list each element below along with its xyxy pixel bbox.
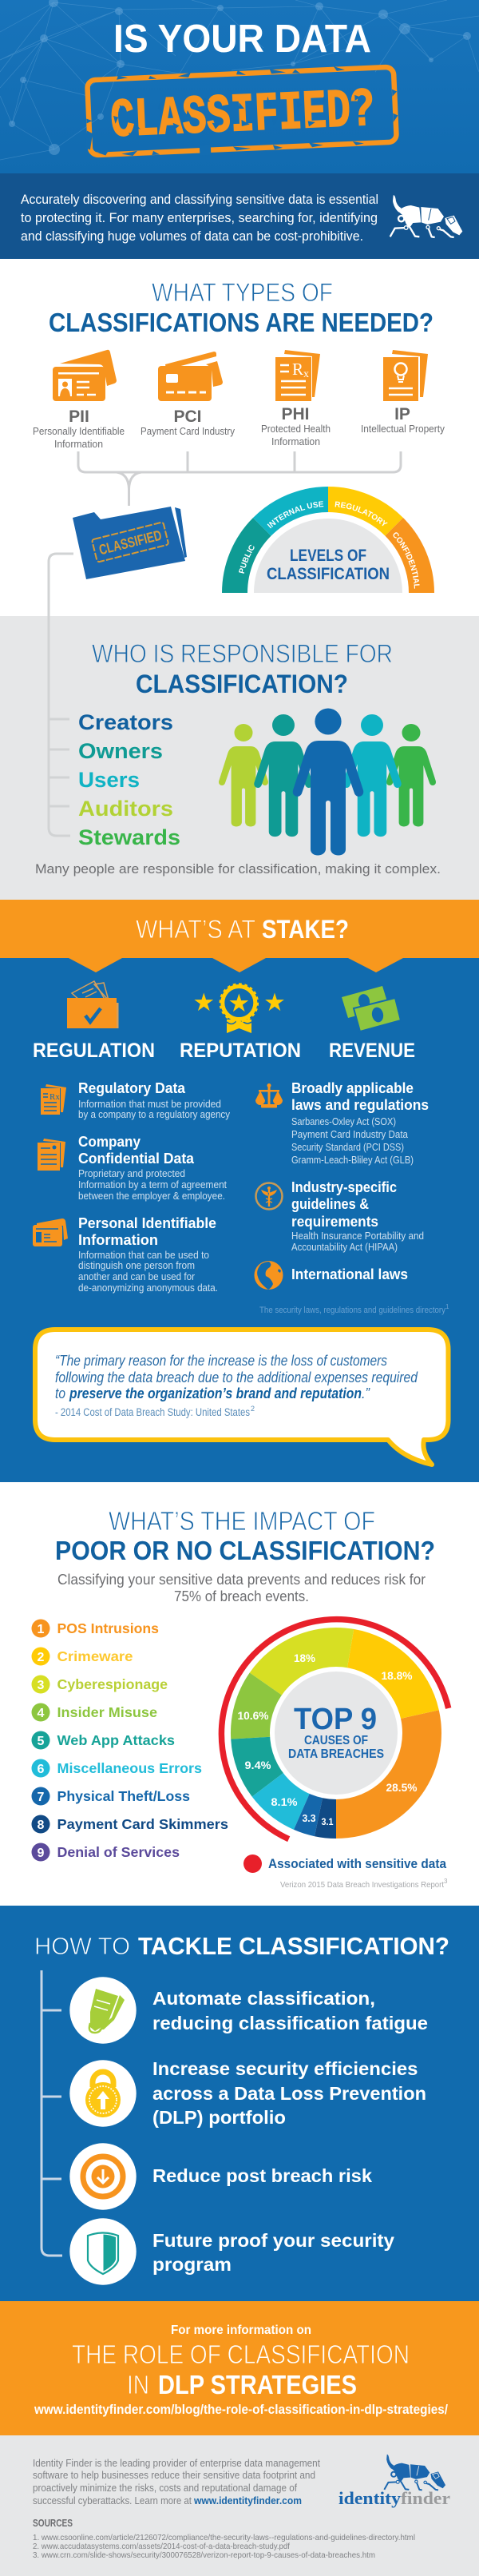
label: PII: PII	[69, 407, 89, 426]
logo: identity finder: finder	[401, 2488, 450, 2508]
icon: classified folder	[73, 507, 187, 579]
label: PCI: PCI	[173, 407, 202, 426]
icon: id card	[33, 1218, 68, 1246]
panel: footer	[0, 2435, 479, 2576]
panel: intro band	[0, 173, 479, 259]
item: company confidential data: Confidential Data	[78, 1151, 195, 1167]
gauge centre	[254, 519, 402, 593]
list: breach causes: Web App Attacks	[57, 1732, 175, 1748]
list: roles: Users	[78, 768, 140, 792]
icon: PCI cards	[158, 352, 223, 401]
list: sources: 1. www.csoonline.com/article/2126072/compliance/the-security-laws--regulations-and-guidelines-directory.html	[33, 2533, 415, 2542]
stamp: classified: CLASSIFIED?	[109, 80, 376, 153]
gauge labels	[239, 501, 420, 589]
callout: customer loss quote: .”	[362, 1385, 370, 1401]
heading: impact	[55, 1506, 435, 1565]
heading: how to tackle: HOW TO	[34, 1932, 130, 1960]
text: about identity finder: proactively minimize the risks, costs and reputational damage of	[33, 2482, 297, 2494]
icon: revenue banknotes	[342, 986, 401, 1032]
text: intro paragraph: to protecting it. For many enterprises, searching for, identifying	[21, 210, 378, 225]
panel: what's at stake	[0, 900, 479, 1482]
icon: PHI document	[275, 350, 320, 401]
donut percentages: 18%	[294, 1652, 316, 1664]
step: automate	[69, 1977, 428, 2044]
item: personal identifiable information: Information that can be used to	[78, 1249, 209, 1261]
step: security efficiencies: Increase security efficiencies	[152, 2058, 418, 2079]
heading: how to tackle: TACKLE CLASSIFICATION?	[138, 1932, 449, 1960]
connector: steps line	[42, 1970, 62, 2256]
heading: role of classification: DLP STRATEGIES	[158, 2370, 357, 2399]
heading: role of classification	[72, 2339, 410, 2399]
heading: role of classification: THE ROLE OF CLASSIFICATION	[72, 2339, 410, 2369]
item: industry-specific guidelines: requirements	[291, 1214, 378, 1230]
label: PHI: Protected Health	[261, 423, 331, 435]
text: impact summary	[57, 1572, 426, 1604]
gauge labels: INTERNAL USE	[267, 501, 324, 529]
item: international laws: International laws	[291, 1266, 408, 1282]
callout: customer loss quote: to	[55, 1385, 65, 1401]
heading: what types	[49, 278, 433, 337]
heading: role of classification: IN	[127, 2370, 149, 2399]
label: IP: Intellectual Property	[361, 423, 445, 435]
icon: scales of justice	[255, 1083, 283, 1107]
item: international laws	[254, 1261, 408, 1290]
list: breach causes: Payment Card Skimmers	[57, 1816, 228, 1832]
chart: levels of classification gauge	[222, 487, 434, 593]
label: revenue: REVENUE	[329, 1040, 415, 1062]
text: about identity finder	[33, 2457, 320, 2506]
item: industry-specific guidelines: Health Insurance Portability and	[291, 1230, 424, 1242]
list: breach causes: 9	[38, 1847, 45, 1860]
text: about identity finder: Identity Finder is the leading provider of enterprise data management	[33, 2457, 320, 2469]
list: breach causes: Cyberespionage	[57, 1676, 168, 1692]
icon: rx page: Rx	[49, 1092, 60, 1102]
connector: bracket to folder	[78, 451, 401, 506]
item: regulatory data	[41, 1080, 230, 1120]
item: regulatory data: Regulatory Data	[78, 1080, 186, 1096]
panel: who is responsible	[0, 616, 479, 900]
list: roles: Owners	[78, 739, 163, 763]
label: PHI: PHI	[281, 405, 310, 423]
illustration: group of people	[219, 708, 436, 855]
segment: confidential	[385, 518, 434, 593]
heading: impact: POOR OR NO CLASSIFICATION?	[55, 1536, 435, 1565]
icon: robot dog	[390, 195, 462, 237]
list: breach causes: 4	[38, 1707, 45, 1720]
donut centre title	[288, 1703, 384, 1761]
banner: orange heading with pointers: STAKE?	[262, 915, 349, 944]
item: industry-specific guidelines: Accountability Act (HIPAA)	[291, 1241, 398, 1253]
callout: customer loss quote: 2	[251, 1405, 255, 1413]
text: about identity finder: www.identityfinder.com	[193, 2495, 302, 2506]
item: industry-specific guidelines	[255, 1179, 424, 1253]
text: impact summary: 75% of breach events.	[174, 1588, 309, 1604]
item: broadly applicable laws: laws and regulations	[291, 1097, 429, 1113]
panel: impact of poor classification	[0, 1482, 479, 1906]
gauge title: LEVELS OF	[290, 547, 366, 565]
text: intro paragraph	[21, 192, 378, 244]
gauge title: CLASSIFICATION	[267, 565, 390, 583]
callout: customer loss quote: “The primary reason for the increase is the loss of customers	[55, 1353, 387, 1369]
label: reputation: REPUTATION	[180, 1040, 301, 1062]
text: intro paragraph: Accurately discovering and classifying sensitive data is essential	[21, 192, 378, 207]
list: sources	[33, 2518, 415, 2560]
label: IP: IP	[394, 405, 410, 423]
gauge labels: REGULATORY	[335, 502, 388, 526]
icon: classified folder: CLASSIFIED	[97, 527, 163, 558]
donut percentages: 8.1%	[271, 1795, 298, 1808]
step: reduce risk: Reduce post breach risk	[152, 2165, 372, 2186]
gauge labels: PUBLIC	[239, 545, 255, 574]
list: breach causes: Denial of Services	[57, 1844, 180, 1860]
icon: padlock	[85, 2072, 121, 2117]
banner: orange heading with pointers	[0, 900, 479, 972]
item: broadly applicable laws: Gramm-Leach-Bliley Act (GLB)	[291, 1154, 414, 1166]
icon: target arrow	[83, 2157, 123, 2196]
text: for more information: For more information on	[171, 2324, 311, 2337]
arc: associated with sensitive data	[221, 1620, 449, 1839]
icon: regulation folder	[67, 981, 118, 1028]
callout: customer loss quote: preserve the organization’s brand and reputation	[69, 1385, 362, 1401]
label: PCI	[141, 407, 236, 437]
list: breach causes: 2	[38, 1651, 45, 1664]
panel: hero header	[0, 0, 479, 174]
text: about identity finder: successful cyberattacks. Learn more at	[33, 2495, 192, 2506]
gauge labels: CONFIDENTIAL	[393, 532, 420, 589]
donut percentages	[238, 1652, 418, 1827]
logo: identity finder: identity	[338, 2488, 401, 2508]
list: breach causes	[32, 1619, 228, 1862]
heading: who is responsible: CLASSIFICATION?	[136, 670, 348, 698]
label: PCI: Payment Card Industry	[141, 426, 236, 437]
item: company confidential data	[38, 1134, 227, 1202]
list: sources: SOURCES	[33, 2518, 73, 2529]
label: PHI	[261, 405, 331, 447]
icon: PHI document: R	[292, 360, 303, 379]
list: breach causes: Physical Theft/Loss	[57, 1788, 190, 1804]
text: responsibility caption: Many people are responsible for classification, making it complex.	[35, 861, 441, 877]
label: IP	[361, 405, 445, 435]
donut percentages: 10.6%	[238, 1709, 269, 1722]
footnote: laws directory: The security laws, regulations and guidelines directory	[259, 1306, 445, 1315]
list: sources: 3. www.crn.com/slide-shows/security/300076528/verizon-report-top-9-causes-of-data-breaches.htm	[33, 2550, 375, 2560]
item: personal identifiable information: another and can be used for	[78, 1270, 196, 1282]
list: breach causes: 3	[38, 1679, 45, 1692]
icon: rx page	[41, 1084, 66, 1115]
legend: sensitive data	[243, 1854, 446, 1873]
title: is your data: IS YOUR DATA	[113, 18, 371, 61]
segment: regulatory	[328, 487, 403, 536]
label: regulation: REGULATION	[33, 1040, 155, 1062]
item: personal identifiable information: Personal Identifiable	[78, 1215, 216, 1231]
callout: customer loss quote: following the data breach due to the additional expenses required	[55, 1369, 418, 1385]
panel: classification types	[33, 278, 445, 593]
icon: globe	[254, 1261, 283, 1290]
item: industry-specific guidelines: Industry-specific	[291, 1179, 397, 1195]
list: breach causes: Miscellaneous Errors	[57, 1760, 202, 1776]
item: company confidential data: Proprietary and protected	[78, 1167, 185, 1179]
segment: public	[222, 518, 271, 593]
icon: PHI document: x	[303, 368, 309, 380]
step: future proof: program	[152, 2254, 232, 2275]
connector: folder to roles	[49, 554, 73, 836]
chart: top 9 causes donut	[221, 1620, 449, 1839]
step: automate: Automate classification,	[152, 1988, 375, 2009]
label: PII	[33, 407, 125, 450]
label: PII: Personally Identifiable	[33, 426, 125, 437]
list: roles: Auditors	[78, 797, 173, 821]
list: roles: Creators	[78, 710, 173, 734]
gauge title	[267, 547, 390, 583]
footnote: laws directory: 1	[445, 1303, 449, 1310]
list: breach causes: 8	[38, 1819, 45, 1832]
item: company confidential data: between the employer & employee.	[78, 1190, 225, 1202]
text: about identity finder: software to help businesses reduce their sensitive data footprint and	[33, 2469, 315, 2481]
list: breach causes: 7	[38, 1791, 45, 1804]
item: personal identifiable information	[33, 1215, 218, 1294]
list: breach causes: 1	[38, 1623, 45, 1636]
logo: identity finder	[338, 2455, 450, 2508]
item: broadly applicable laws: Payment Card Industry Data	[291, 1128, 409, 1140]
icon: reputation rosette	[194, 984, 284, 1033]
panel: call to action	[0, 2301, 479, 2435]
icon: document	[38, 1139, 65, 1171]
step: security efficiencies	[69, 2058, 426, 2128]
heading: impact: WHAT’S THE IMPACT OF	[109, 1506, 375, 1536]
item: broadly applicable laws: Security Standard (PCI DSS)	[291, 1141, 404, 1153]
step: reduce risk	[69, 2143, 372, 2210]
icon: tags	[89, 1989, 125, 2033]
heading: what types: WHAT TYPES OF	[152, 278, 333, 307]
step: automate: reducing classification fatigue	[152, 2013, 428, 2033]
stamp: classified	[82, 64, 399, 161]
icon: caduceus medallion	[255, 1183, 283, 1210]
label: PHI: Information	[271, 436, 320, 447]
donut percentages: 28.5%	[386, 1781, 418, 1794]
text: impact summary: Classifying your sensitive data prevents and reduces risk for	[57, 1572, 426, 1588]
list: roles	[78, 710, 180, 849]
donut percentages: 9.4%	[244, 1759, 271, 1771]
icon: shield	[88, 2232, 118, 2274]
heading: who is responsible	[92, 639, 393, 698]
heading: what types: CLASSIFICATIONS ARE NEEDED?	[49, 308, 433, 337]
text: intro paragraph: and classifying huge volumes of data can be cost-prohibitive.	[21, 229, 363, 244]
callout: customer loss quote: - 2014 Cost of Data Breach Study: United States	[55, 1406, 250, 1418]
item: broadly applicable laws: Sarbanes-Oxley Act (SOX)	[291, 1115, 396, 1127]
list: breach causes: 5	[38, 1735, 45, 1748]
donut centre title: CAUSES OF	[304, 1734, 368, 1747]
donut percentages: 18.8%	[382, 1669, 413, 1682]
item: broadly applicable laws: Broadly applicable	[291, 1080, 414, 1096]
list: breach causes: Insider Misuse	[57, 1704, 157, 1720]
item: company confidential data: Company	[78, 1134, 141, 1150]
banner: orange heading with pointers: WHAT’S AT	[136, 915, 255, 944]
source: verizon report: 3	[444, 1878, 448, 1885]
item: regulatory data: by a company to a regulatory agency	[78, 1108, 230, 1120]
item: regulatory data: Information that must be provided	[78, 1098, 221, 1110]
icon: IP document with bulb	[383, 350, 428, 401]
step: security efficiencies: across a Data Loss Prevention	[152, 2083, 426, 2104]
item: company confidential data: Information by a term of agreement	[78, 1179, 227, 1191]
panel: how to tackle classification	[0, 1906, 479, 2301]
donut percentages: 3.1	[321, 1816, 334, 1827]
step: future proof	[69, 2218, 394, 2285]
list: breach causes: 6	[38, 1763, 45, 1776]
step: future proof: Future proof your security	[152, 2230, 394, 2251]
item: personal identifiable information: distinguish one person from	[78, 1259, 195, 1271]
segment: internal use	[253, 487, 328, 536]
callout: customer loss quote	[35, 1330, 449, 1465]
donut percentages: 3.3	[302, 1812, 316, 1824]
source: verizon report: Verizon 2015 Data Breach Investigations Report	[280, 1880, 444, 1890]
donut centre title: DATA BREACHES	[288, 1747, 384, 1761]
item: personal identifiable information: Information	[78, 1232, 158, 1248]
label: PII: Information	[54, 439, 103, 450]
item: industry-specific guidelines: guidelines &	[291, 1196, 369, 1212]
list: breach causes: Crimeware	[57, 1648, 133, 1664]
list: sources: 2. www.accudatasystems.com/assets/2014-cost-of-a-data-breach-study.pdf	[33, 2542, 290, 2551]
list: roles: Stewards	[78, 825, 180, 849]
heading: who is responsible: WHO IS RESPONSIBLE FOR	[92, 639, 393, 668]
item: personal identifiable information: de-anonymizing anonymous data.	[78, 1282, 218, 1294]
step: security efficiencies: (DLP) portfolio	[152, 2107, 286, 2128]
icon: PII id cards	[53, 350, 117, 401]
donut centre title: TOP 9	[294, 1703, 377, 1736]
item: broadly applicable laws	[255, 1080, 429, 1166]
list: breach causes: POS Intrusions	[57, 1620, 159, 1636]
legend: sensitive data: Associated with sensitive data	[268, 1856, 446, 1871]
